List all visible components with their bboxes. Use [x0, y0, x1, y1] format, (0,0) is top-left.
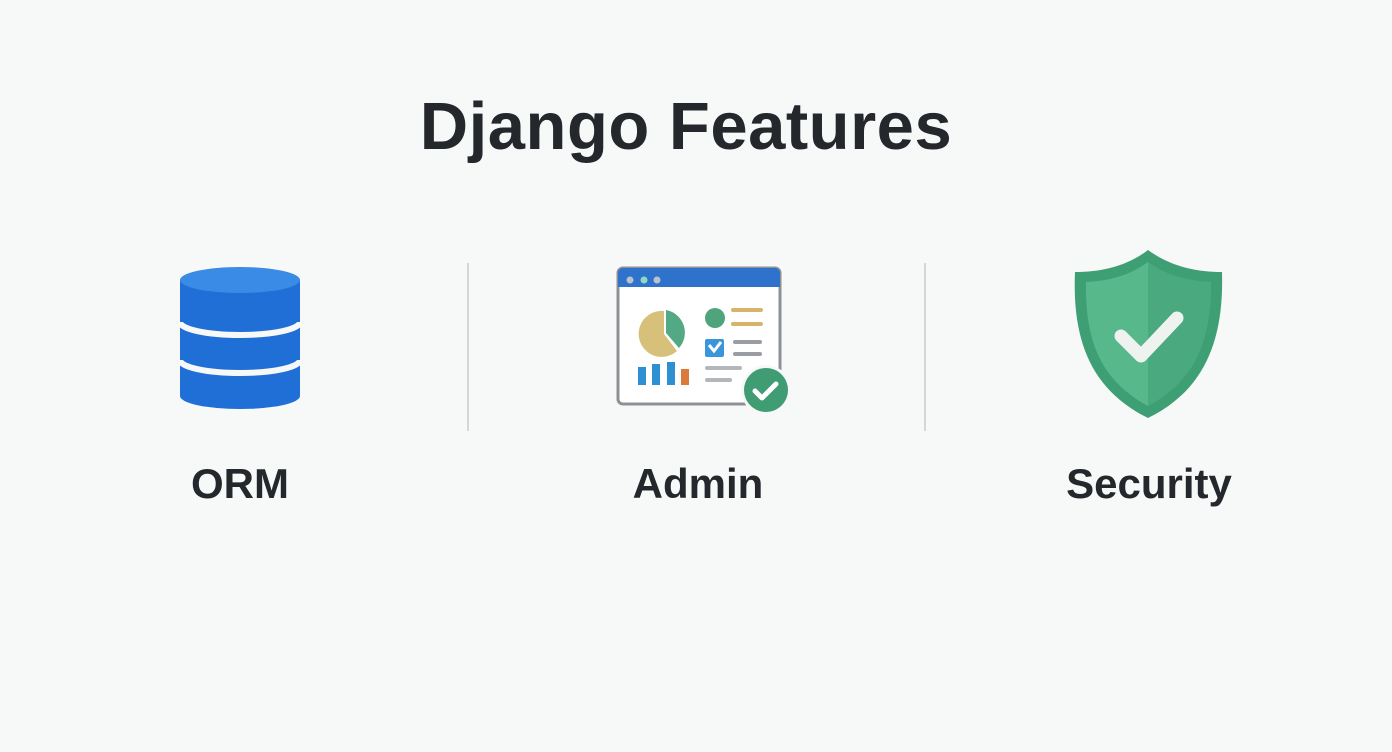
label: Admin: Admin — [633, 460, 763, 507]
divider 2 — [924, 263, 926, 431]
icon: shield — [1074, 250, 1222, 418]
title: Django Features — [420, 89, 952, 164]
label: ORM: ORM — [191, 460, 289, 507]
icon: database — [180, 267, 300, 409]
icon: admin dashboard — [616, 266, 788, 412]
label: Security: Security — [1066, 460, 1232, 507]
divider 1 — [467, 263, 469, 431]
